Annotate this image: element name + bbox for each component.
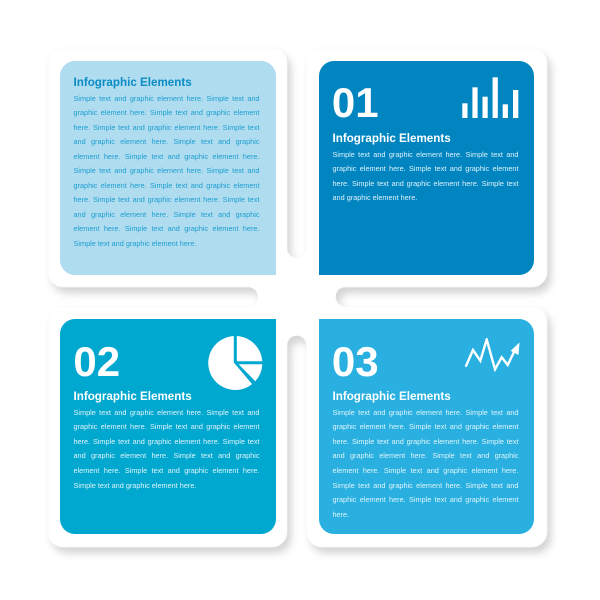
text block: and graphic element here. Simple text and graphic: [74, 451, 260, 460]
heading: Infographic Elements: [332, 390, 451, 403]
text block: here. Simple text and graphic element here. Simple text: [332, 179, 518, 188]
text block: [74, 94, 260, 248]
text block: Simple text and graphic element here.: [74, 239, 196, 248]
heading: Infographic Elements: [74, 76, 192, 89]
text block: graphic element here. Simple text and graphic element: [332, 422, 518, 431]
text block: Simple text and graphic element here. Simple text and: [332, 481, 518, 490]
text block: [332, 408, 518, 519]
text block: here. Simple text and graphic element here. Simple text: [74, 123, 260, 132]
text block: [74, 408, 260, 490]
text block: Simple text and graphic element here. Simple text and: [332, 150, 518, 158]
panel: top-left light blue text card: [60, 60, 276, 275]
text block: and graphic element here. Simple text and graphic: [74, 137, 260, 146]
text block: and graphic element here. Simple text and graphic: [74, 210, 260, 219]
text block: here. Simple text and graphic element here. Simple text: [74, 437, 260, 446]
text block: here.: [332, 510, 349, 519]
text block: and graphic element here. Simple text and graphic: [332, 451, 518, 460]
panel: 02 teal blue card: [60, 318, 276, 534]
text block: graphic element here. Simple text and graphic element: [74, 108, 260, 117]
icon: line chart with arrow: [464, 338, 520, 372]
text block: graphic element here. Simple text and graphic element: [332, 164, 518, 173]
text block: element here. Simple text and graphic element here.: [74, 466, 260, 475]
icon: bar chart: [462, 77, 518, 118]
text block: Simple text and graphic element here. Simple text and: [74, 408, 260, 417]
icon: pie chart: [208, 336, 262, 390]
text block: and graphic element here.: [332, 193, 417, 202]
number 02: 02: [73, 338, 120, 385]
text block: Simple text and graphic element here. Simple text and: [332, 408, 518, 417]
text block: here. Simple text and graphic element here. Simple text: [74, 195, 260, 204]
text block: Simple text and graphic element here. Simple text and: [74, 166, 260, 175]
text block: graphic element here. Simple text and graphic element: [332, 495, 518, 504]
panel: 01 dark blue card: [318, 60, 534, 275]
panel: 03 sky blue card: [318, 318, 534, 534]
text block: element here. Simple text and graphic element here.: [74, 152, 260, 161]
number 01: 01: [332, 79, 379, 126]
text block: here. Simple text and graphic element here. Simple text: [332, 437, 518, 446]
text block: element here. Simple text and graphic element here.: [74, 224, 260, 233]
text block: Simple text and graphic element here. Simple text and: [74, 94, 260, 102]
heading: Infographic Elements: [74, 390, 192, 403]
heading: Infographic Elements: [332, 132, 451, 145]
text block: Simple text and graphic element here.: [74, 481, 196, 490]
text block: graphic element here. Simple text and graphic element: [74, 181, 260, 190]
text block: graphic element here. Simple text and graphic element: [74, 422, 260, 431]
text block: element here. Simple text and graphic element here.: [332, 466, 518, 475]
number 03: 03: [332, 338, 379, 385]
text block: [332, 150, 518, 202]
